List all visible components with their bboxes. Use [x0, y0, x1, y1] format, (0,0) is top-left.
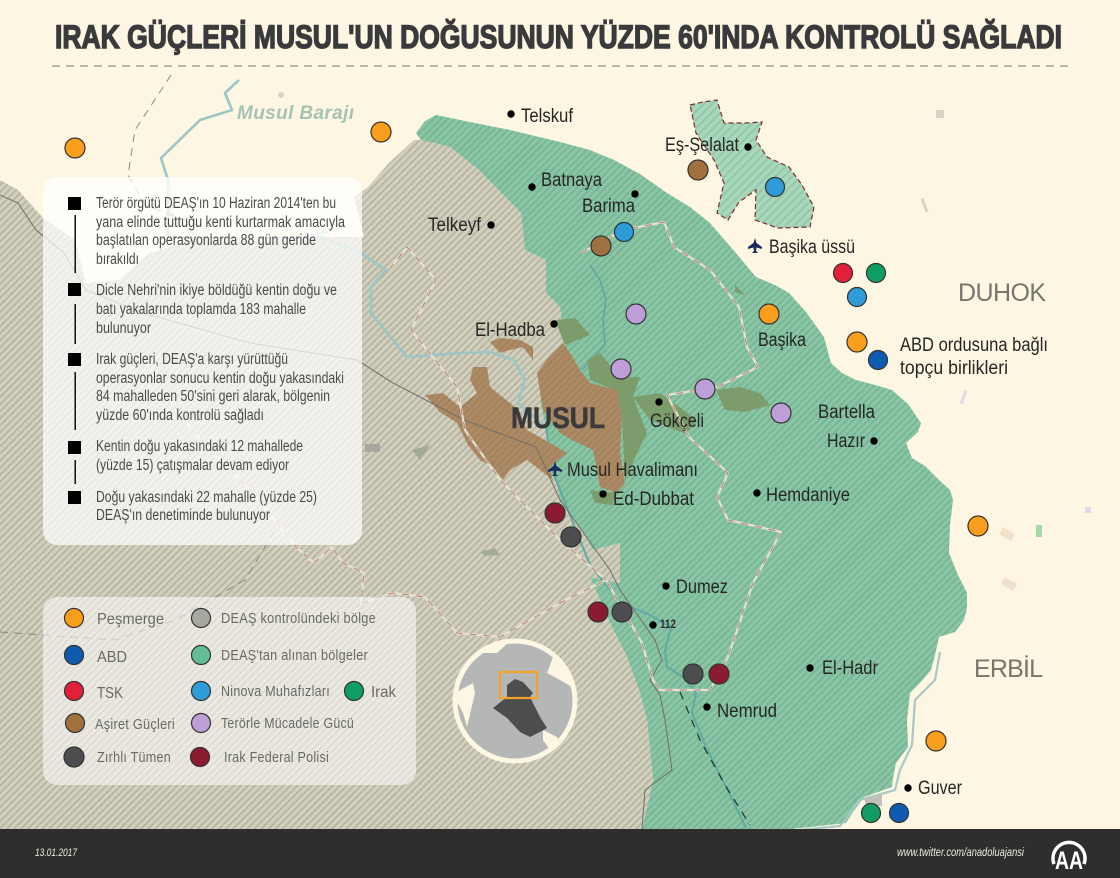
place labels: Musul Havalimanı: [567, 460, 698, 481]
place labels: Gökçeli: [650, 411, 704, 432]
place dots: [487, 110, 912, 792]
legend labels: Aşiret Güçleri: [95, 716, 175, 733]
fact text: (yüzde 15) çatışmalar devam ediyor: [96, 457, 289, 474]
legend labels: Peşmerge: [97, 611, 164, 628]
icon: AA logo: [1053, 842, 1085, 875]
icon: plane, Mosul airport: [548, 461, 562, 476]
province label: Duhok: DUHOK: [958, 279, 1046, 307]
place labels: Guver: [918, 778, 963, 799]
legend swatches: [64, 608, 364, 767]
icon: AA logo: AA: [1055, 847, 1083, 875]
legend labels: Ninova Muhafızları: [221, 683, 330, 700]
fact text: yana elinde tuttuğu kenti kurtarmak amacıyla: [96, 214, 345, 231]
place labels: Hazır: [827, 431, 866, 452]
icon: plane, Başika base: [748, 238, 762, 253]
place labels: Başika üssü: [769, 237, 855, 258]
place labels: ABD ordusuna bağlı: [900, 335, 1048, 356]
river: Tigris lower course: [546, 427, 746, 828]
footer bar: [0, 829, 1120, 878]
place labels: Hemdaniye: [766, 485, 850, 506]
Mosul city: brown urban area: [425, 338, 625, 493]
title divider: [52, 65, 1068, 67]
place labels: 112: [660, 617, 676, 631]
place labels: Ed-Dubbat: [613, 489, 695, 510]
province border: thin dark line: [0, 195, 672, 829]
fact text: bulunuyor: [96, 320, 151, 337]
legend labels: Terörle Mücadele Gücü: [221, 715, 354, 732]
legend labels: TSK: [97, 685, 123, 702]
label: Musul Barajı: Musul Barajı: [237, 103, 354, 124]
island: Eş-Şelalat liberated area: [690, 100, 814, 228]
place labels: Başika: [758, 330, 806, 351]
fact text: yüzde 60'ında kontrolü sağladı: [96, 407, 264, 424]
place labels: Barima: [582, 196, 635, 217]
small settlement near Guver: [864, 794, 882, 806]
footer url: www.twitter.com/anadoluajansi: [897, 845, 1024, 859]
panel: legend: [43, 597, 416, 785]
place labels: Eş-Şelalat: [665, 135, 740, 156]
fact text: DEAŞ'ın denetiminde bulunuyor: [96, 507, 270, 524]
force markers on map: [65, 122, 988, 822]
place labels: [428, 106, 1048, 799]
place labels: El-Hadr: [822, 658, 879, 679]
fact text: Irak güçleri, DEAŞ'a karşı yürüttüğü: [96, 351, 288, 368]
river: upper tributary near Barima: [582, 265, 606, 370]
fact text: Dicle Nehri'nin ikiye böldüğü kentin doğu ve: [96, 282, 337, 299]
province border: red-white dashed loop: [170, 222, 781, 690]
fact text: 84 mahalleden 50'sini geri alarak, bölgenin: [96, 388, 330, 405]
fact text: batı yakalarında toplamda 183 mahalle: [96, 301, 306, 318]
province label: Erbil: ERBİL: [974, 654, 1043, 683]
international border dashes: [0, 75, 275, 640]
city label: Musul: MUSUL: [511, 402, 605, 435]
timeline markers: [68, 197, 81, 504]
legend labels: DEAŞ'tan alınan bölgeler: [221, 647, 368, 664]
fact text: Doğu yakasındaki 22 mahalle (yüzde 25): [96, 489, 317, 506]
place labels: Telkeyf: [428, 215, 482, 236]
Mosul Dam lake edge: [168, 180, 345, 240]
region: territories taken from DEAŞ: [416, 115, 967, 829]
place labels: Bartella: [818, 402, 875, 423]
river: Tigris upper course: [161, 80, 546, 427]
region: DEAŞ controlled area: [0, 140, 653, 829]
legend labels: Irak: [371, 684, 397, 701]
legend labels: Irak Federal Polisi: [224, 749, 329, 766]
panel: key facts: [43, 177, 362, 545]
inset locator map: [455, 641, 575, 761]
place labels: Telskuf: [521, 106, 574, 127]
place labels: Batnaya: [541, 170, 602, 191]
legend labels: DEAŞ kontrolündeki bölge: [221, 610, 376, 627]
footer date: 13.01.2017: [35, 847, 78, 859]
fact text: Terör örgütü DEAŞ'ın 10 Haziran 2014'ten bu: [96, 195, 336, 212]
fact text: Kentin doğu yakasındaki 12 mahallede: [96, 438, 303, 455]
legend labels: [95, 610, 397, 766]
legend labels: ABD: [97, 649, 127, 666]
place labels: El-Hadba: [475, 320, 545, 341]
fact text: bırakıldı: [96, 251, 139, 268]
fact text: başlatılan operasyonlarda 88 gün geride: [96, 232, 316, 249]
place labels: Nemrud: [717, 701, 777, 722]
river: eastern Zab: [800, 652, 940, 830]
place labels: Dumez: [676, 577, 728, 598]
legend labels: Zırhlı Tümen: [97, 749, 171, 766]
dark-green settlements: [555, 285, 770, 505]
fact text: [96, 195, 345, 524]
paper specks: [278, 92, 1091, 591]
place labels: topçu birlikleri: [900, 358, 1008, 379]
border dashes south of Nemrud: [680, 692, 750, 825]
fact text: operasyonlar sonucu kentin doğu yakasındaki: [96, 370, 344, 387]
